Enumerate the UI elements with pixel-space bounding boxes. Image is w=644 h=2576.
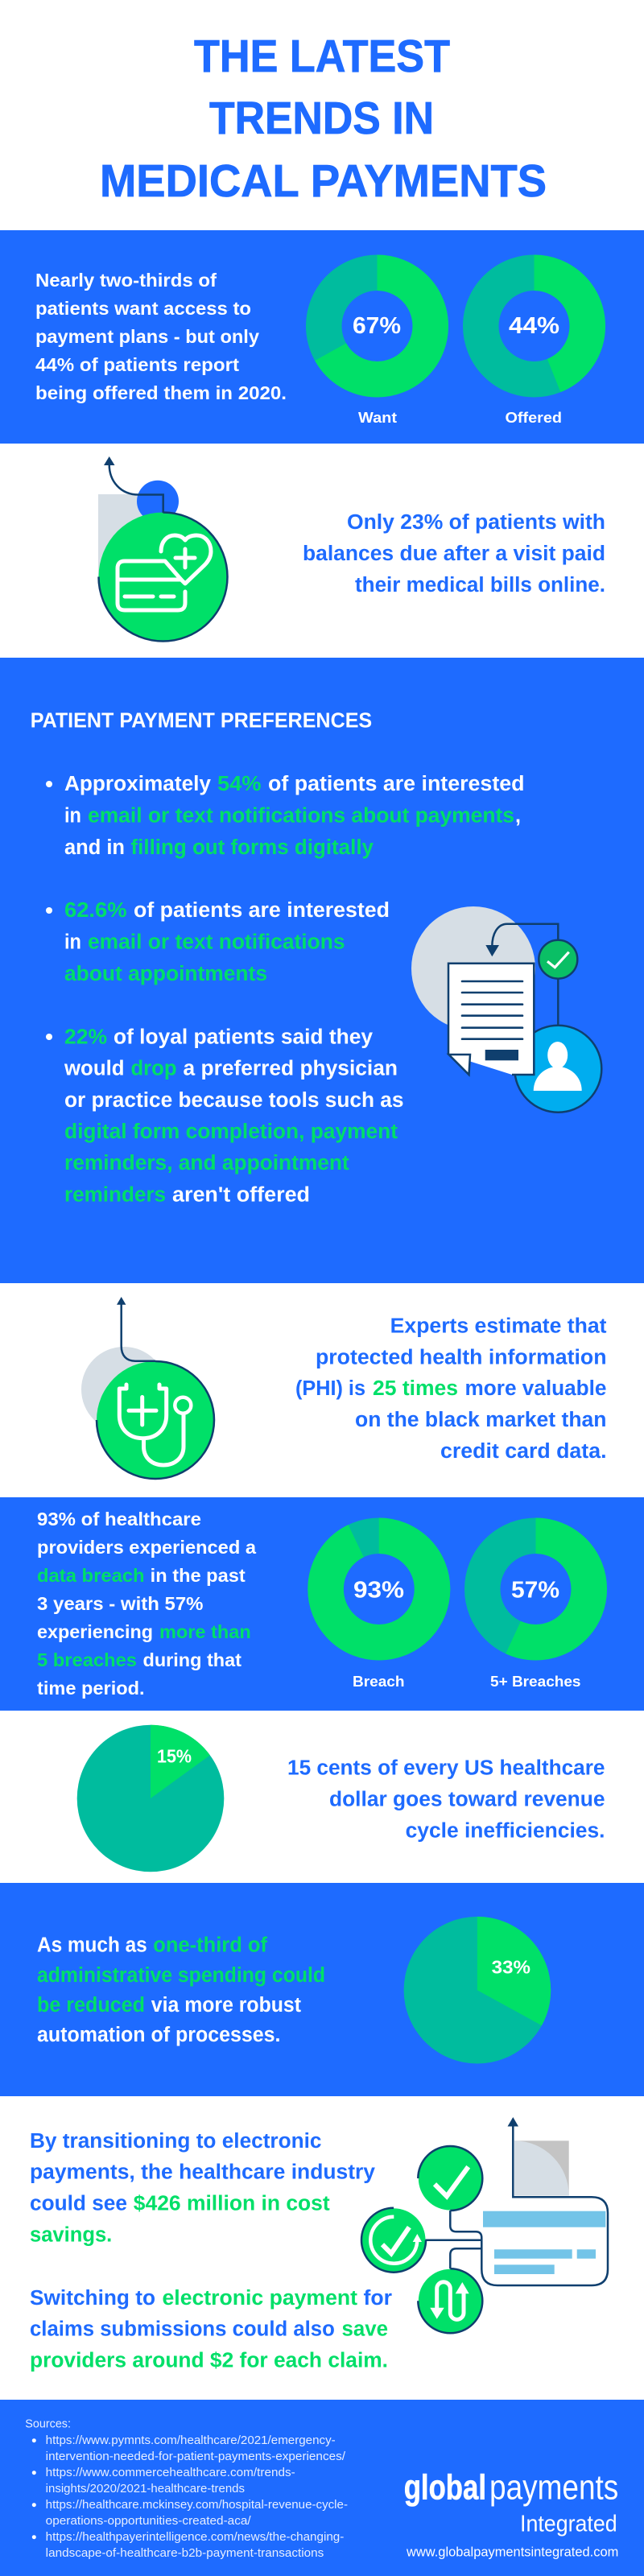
bullet: 54% interested in notifications: 54% <box>217 773 261 795</box>
text: one-third statement: automation of processes. <box>37 2024 280 2046</box>
panel: footer <box>0 2400 644 2576</box>
icon: credit card with heart <box>98 456 227 641</box>
text: PHI value statement: 25 times <box>373 1377 458 1400</box>
text: one-third statement: one-third of <box>153 1934 267 1957</box>
text: cost savings statement: could see <box>30 2193 127 2215</box>
text: data breach statement: time period. <box>37 1678 145 1699</box>
text: cost savings statement: savings. <box>30 2223 112 2246</box>
text: payment plans statement <box>35 270 287 403</box>
donut chart: 5+ breaches 57% <box>482 1536 589 1690</box>
panel: revenue cycle inefficiencies <box>77 1725 605 1872</box>
text: cost savings statement: electronic payment <box>163 2287 358 2310</box>
bullet: 62.6% interested in appointment notifications: about appointments <box>64 963 267 985</box>
donut chart: offered 44% <box>481 273 588 426</box>
bullet: 62.6% interested in appointment notifications: email or text notifications <box>88 931 345 953</box>
sources list: intervention-needed-for-patient-payments-experiences/ <box>46 2450 346 2463</box>
text: one-third statement: administrative spending could <box>37 1964 325 1987</box>
text: payment plans statement: Nearly two-thirds of <box>35 270 217 291</box>
donut chart: offered 44%: Offered <box>506 410 562 426</box>
text: cost savings statement: Switching to <box>30 2287 155 2310</box>
bullet: 22% would drop a practice: a preferred physician <box>184 1058 398 1080</box>
sources list: https://healthpayerintelligence.com/news/the-changing- <box>46 2531 344 2544</box>
title: THE LATEST <box>194 31 450 82</box>
bullet: 62.6% interested in appointment notifications: in <box>64 931 81 953</box>
text: PHI value statement: protected health information <box>316 1346 607 1368</box>
text: 15 cents statement: 15 cents of every US healthcare <box>287 1757 605 1780</box>
pie chart: 15% <box>77 1725 224 1872</box>
title <box>100 31 547 207</box>
sources list: https://www.pymnts.com/healthcare/2021/emergency- <box>46 2434 336 2447</box>
pie chart: 15%: 15% <box>157 1745 192 1766</box>
pie chart: 33% <box>404 1917 551 2064</box>
text: online bill statistic: balances due after a visit paid <box>303 543 605 565</box>
panel: cost savings <box>30 2117 608 2372</box>
text: PHI value statement: on the black market than <box>355 1409 607 1431</box>
text: payment plans statement: payment plans - but only <box>35 326 259 347</box>
logo: global payments integrated: Integrated <box>520 2511 617 2537</box>
text: PHI value statement: more valuable <box>465 1377 607 1400</box>
text: data breach statement: more than <box>159 1621 251 1642</box>
text: data breach statement: 93% of healthcare <box>37 1509 201 1530</box>
text: 15 cents statement <box>287 1757 605 1843</box>
sources list: https://www.commercehealthcare.com/trends- <box>46 2467 295 2479</box>
icon: check badge <box>418 2146 482 2211</box>
text: cost savings statement: $426 million in cost <box>134 2193 330 2215</box>
icon: stethoscope <box>81 1297 214 1479</box>
text: online bill statistic: their medical bills online. <box>355 574 605 597</box>
text: cost savings statement: claims submissions could also <box>30 2318 335 2341</box>
bullet: 22% would drop a practice: or practice because tools such as <box>64 1089 404 1112</box>
donut chart: 5+ breaches 57%: 5+ Breaches <box>490 1674 581 1690</box>
bullet: 54% interested in notifications <box>46 773 525 859</box>
text: PHI value statement: credit card data. <box>440 1440 607 1463</box>
text: payment plans statement: being offered them in 2020. <box>35 382 287 403</box>
text: one-third statement: be reduced <box>37 1994 145 2017</box>
text: PHI value statement: (PHI) is <box>295 1377 365 1400</box>
text: data breach statement: data breach <box>37 1565 145 1586</box>
bullet: 22% would drop a practice: of loyal patients said they <box>114 1026 374 1048</box>
sources list: landscape-of-healthcare-b2b-payment-transactions <box>46 2547 324 2560</box>
text: cost savings statement: providers around $2 for each claim. <box>30 2350 388 2372</box>
panel: administrative spending <box>0 1883 644 2096</box>
panel: protected health information <box>81 1297 607 1479</box>
logo: global payments integrated: payments <box>489 2467 618 2507</box>
icon: recurring check badge <box>361 2208 426 2273</box>
bullet: 62.6% interested in appointment notifications: of patients are interested <box>134 899 390 922</box>
bullet: 62.6% interested in appointment notifications <box>46 899 390 985</box>
donut chart: breach 93% <box>326 1536 432 1690</box>
text: one-third statement: via more robust <box>151 1994 301 2017</box>
bullet: 22% would drop a practice: digital form completion, payment <box>64 1121 398 1143</box>
bullet: 22% would drop a practice: aren't offered <box>172 1184 310 1207</box>
donut chart: offered 44%: 44% <box>509 313 559 339</box>
bullet: 22% would drop a practice: drop <box>130 1058 177 1080</box>
sources list: operations-opportunities-created-aca/ <box>46 2515 252 2528</box>
text: data breach statement <box>37 1509 257 1699</box>
text: data breach statement: during that <box>143 1649 242 1670</box>
text: 15 cents statement: dollar goes toward revenue <box>329 1789 605 1811</box>
donut chart: breach 93%: 93% <box>353 1577 404 1603</box>
text: data breach statement: experiencing <box>37 1621 153 1642</box>
text: data breach statement: 5 breaches <box>37 1649 137 1670</box>
bullet: 54% interested in notifications: of patients are interested <box>268 773 525 795</box>
text: PHI value statement: Experts estimate that <box>390 1315 607 1337</box>
sources list: insights/2020/2021-healthcare-trends <box>46 2483 245 2496</box>
text: cost savings statement: payments, the healthcare industry <box>30 2161 376 2183</box>
donut chart: want 67%: Want <box>358 410 397 426</box>
text: data breach statement: in the past <box>151 1565 246 1586</box>
bullet: 54% interested in notifications: , <box>515 805 521 828</box>
bullet: 62.6% interested in appointment notifications: 62.6% <box>64 899 127 922</box>
heading: patient payment preferences: PATIENT PAYMENT PREFERENCES <box>31 710 372 733</box>
bullet: 54% interested in notifications: Approximately <box>64 773 212 795</box>
sources list: https://healthcare.mckinsey.com/hospital-revenue-cycle- <box>46 2499 348 2512</box>
logo: global payments integrated: www.globalpaymentsintegrated.com <box>406 2545 618 2560</box>
text: cost savings statement <box>30 2130 392 2372</box>
bullet: 22% would drop a practice: reminders <box>64 1184 166 1207</box>
bullet: 22% would drop a practice: would <box>64 1058 124 1080</box>
text: online bill statistic: Only 23% of patients with <box>347 511 605 534</box>
text: cost savings statement: for <box>364 2287 392 2310</box>
text: payment plans statement: patients want access to <box>35 298 251 319</box>
bullet: 54% interested in notifications: email or text notifications about payments <box>88 805 514 828</box>
text: payment plans statement: 44% of patients report <box>35 354 239 375</box>
bullet: 54% interested in notifications: filling out forms digitally <box>130 836 374 859</box>
text: one-third statement: As much as <box>37 1934 147 1957</box>
bullet: 22% would drop a practice: reminders, and appointment <box>64 1152 349 1174</box>
title: TRENDS IN <box>209 93 434 144</box>
title: MEDICAL PAYMENTS <box>100 155 547 207</box>
donut chart: want 67% <box>324 273 431 426</box>
text: data breach statement: 3 years - with 57% <box>37 1593 204 1614</box>
text: online bill statistic <box>303 511 605 597</box>
icon: payment card with checks <box>361 2117 608 2333</box>
sources list: Sources: <box>25 2418 71 2431</box>
donut chart: 5+ breaches 57%: 57% <box>511 1577 559 1603</box>
text: PHI value statement <box>295 1315 607 1463</box>
bullet: 54% interested in notifications: and in <box>64 836 125 859</box>
bullet: 22% would drop a practice: 22% <box>64 1026 107 1048</box>
logo: global payments integrated <box>404 2467 618 2560</box>
panel: online bill payment <box>98 456 605 641</box>
donut chart: want 67%: 67% <box>353 313 401 339</box>
text: 15 cents statement: cycle inefficiencies. <box>406 1820 605 1843</box>
panel: patient payment preferences <box>0 658 644 1283</box>
bullet: 54% interested in notifications: in <box>64 805 81 828</box>
pie chart: 33%: 33% <box>492 1957 530 1978</box>
bullet: 22% would drop a practice <box>46 1026 404 1207</box>
text: cost savings statement: By transitioning to electronic <box>30 2130 322 2153</box>
text: cost savings statement: save <box>341 2318 388 2341</box>
panel: data breaches <box>0 1497 644 1711</box>
icon: transfer arrows badge <box>418 2268 482 2333</box>
text: data breach statement: providers experienced a <box>37 1537 257 1558</box>
donut chart: breach 93%: Breach <box>353 1674 404 1690</box>
icon: document and patient <box>411 906 601 1113</box>
sources list <box>25 2418 348 2560</box>
panel: payment plans <box>0 230 644 444</box>
logo: global payments integrated: global <box>404 2467 486 2507</box>
text: one-third statement <box>37 1934 325 2046</box>
